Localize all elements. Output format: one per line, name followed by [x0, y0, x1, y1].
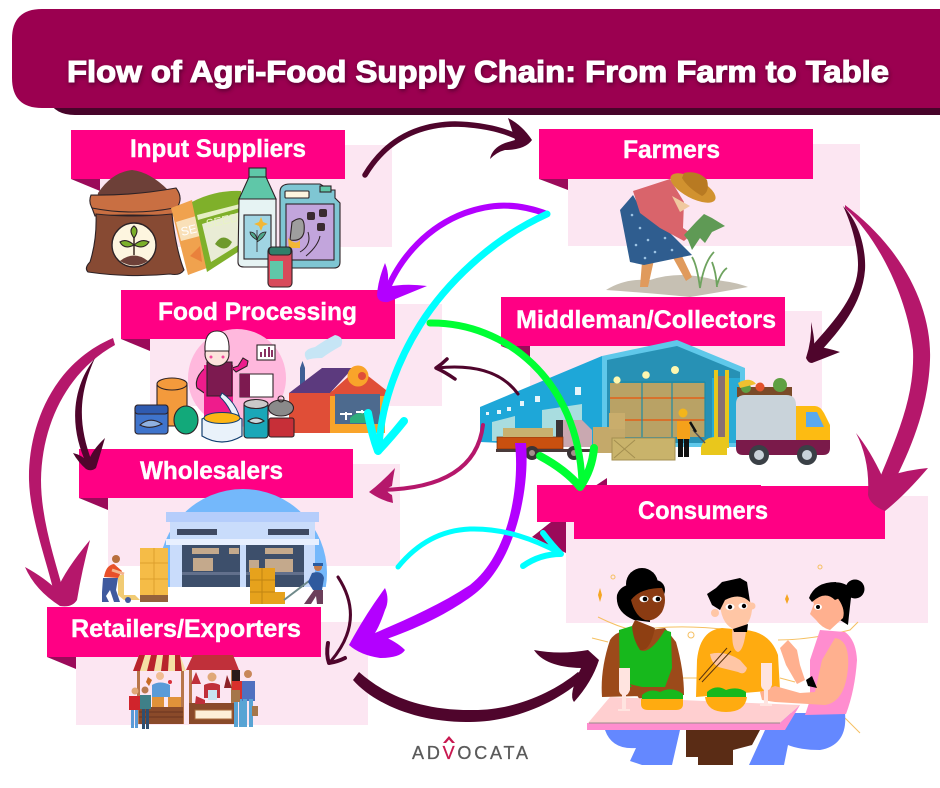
wine glasses: [618, 663, 772, 711]
panel: consumers: Consumers: [638, 497, 768, 525]
table: [587, 697, 800, 730]
arrow: middleman to retailers: [349, 443, 527, 658]
arrow: farmers to consumers: [845, 205, 930, 511]
arrow: food processing to consumers: [430, 323, 594, 487]
panel: food processing: [121, 290, 442, 406]
arrow: input suppliers to farmers: [365, 118, 532, 175]
illustration: fertiliser sack, seeds and agrochemicals: SE: [179, 221, 198, 239]
man in orange: [696, 578, 780, 697]
arrow: retailers to consumers: [353, 650, 599, 722]
arrow: food processing to retailers: [25, 338, 115, 606]
title banner: [12, 9, 940, 115]
title: Flow of Agri-Food Supply Chain: From Farm to Table: [67, 54, 889, 89]
bowls of salad: [641, 687, 747, 712]
panel: farmers: Farmers: [623, 136, 720, 164]
panel: retailers exporters: [47, 607, 368, 725]
illustration: food processing worker, cans and factory: [135, 329, 386, 442]
right delivery truck: [736, 378, 830, 465]
arrow: wholesalers to retailers: [327, 577, 350, 663]
left truck: [496, 420, 593, 460]
panel: middleman collectors: Middleman/Collectors: [516, 306, 776, 334]
arrow: middleman to wholesalers: [369, 425, 483, 503]
panel: input suppliers: [71, 130, 392, 247]
logo: Advocata: ADVOCATA: [412, 743, 528, 763]
children: [129, 686, 151, 729]
arrow: farmers to food processing: [377, 206, 547, 302]
panel: consumers: [532, 478, 928, 623]
arrow: middleman to food processing: [436, 359, 518, 394]
panel: farmers: [539, 129, 860, 246]
illustration: fertiliser sack, seeds and agrochemicals: [86, 168, 340, 287]
woman in green: [602, 568, 684, 700]
illustration: three people eating at a table: [587, 565, 864, 765]
pants: [605, 713, 845, 765]
illustration: farmer planting rice: [606, 167, 748, 297]
adult shoppers: [231, 670, 258, 727]
illustration: market stalls with shoppers: [129, 655, 258, 729]
arrow: wholesalers to consumers: [398, 529, 561, 567]
illustration: fertiliser sack, seeds and agrochemicals: SEEDS: [205, 209, 247, 231]
worker pulling stack: [304, 563, 324, 604]
woman in pink: [760, 580, 864, 715]
arrow: farmers to middleman: [806, 206, 865, 363]
panel: input suppliers: Input Suppliers: [130, 135, 306, 163]
panel: wholesalers: [79, 449, 400, 566]
arrow: food processing to wholesalers: [73, 358, 105, 470]
panel: food processing: Food Processing: [158, 298, 357, 326]
arrow: farmers to wholesalers: [368, 214, 547, 451]
warehouse worker: [677, 408, 696, 457]
illustration: wholesale warehouse with workers: [102, 489, 327, 604]
panel: retailers exporters: Retailers/Exporters: [71, 615, 301, 643]
worker with pallet jack: [102, 555, 140, 603]
illustration: warehouse, trucks and worker: [480, 340, 830, 465]
panel: wholesalers: Wholesalers: [140, 457, 283, 485]
panel: middleman collectors: [501, 297, 822, 413]
